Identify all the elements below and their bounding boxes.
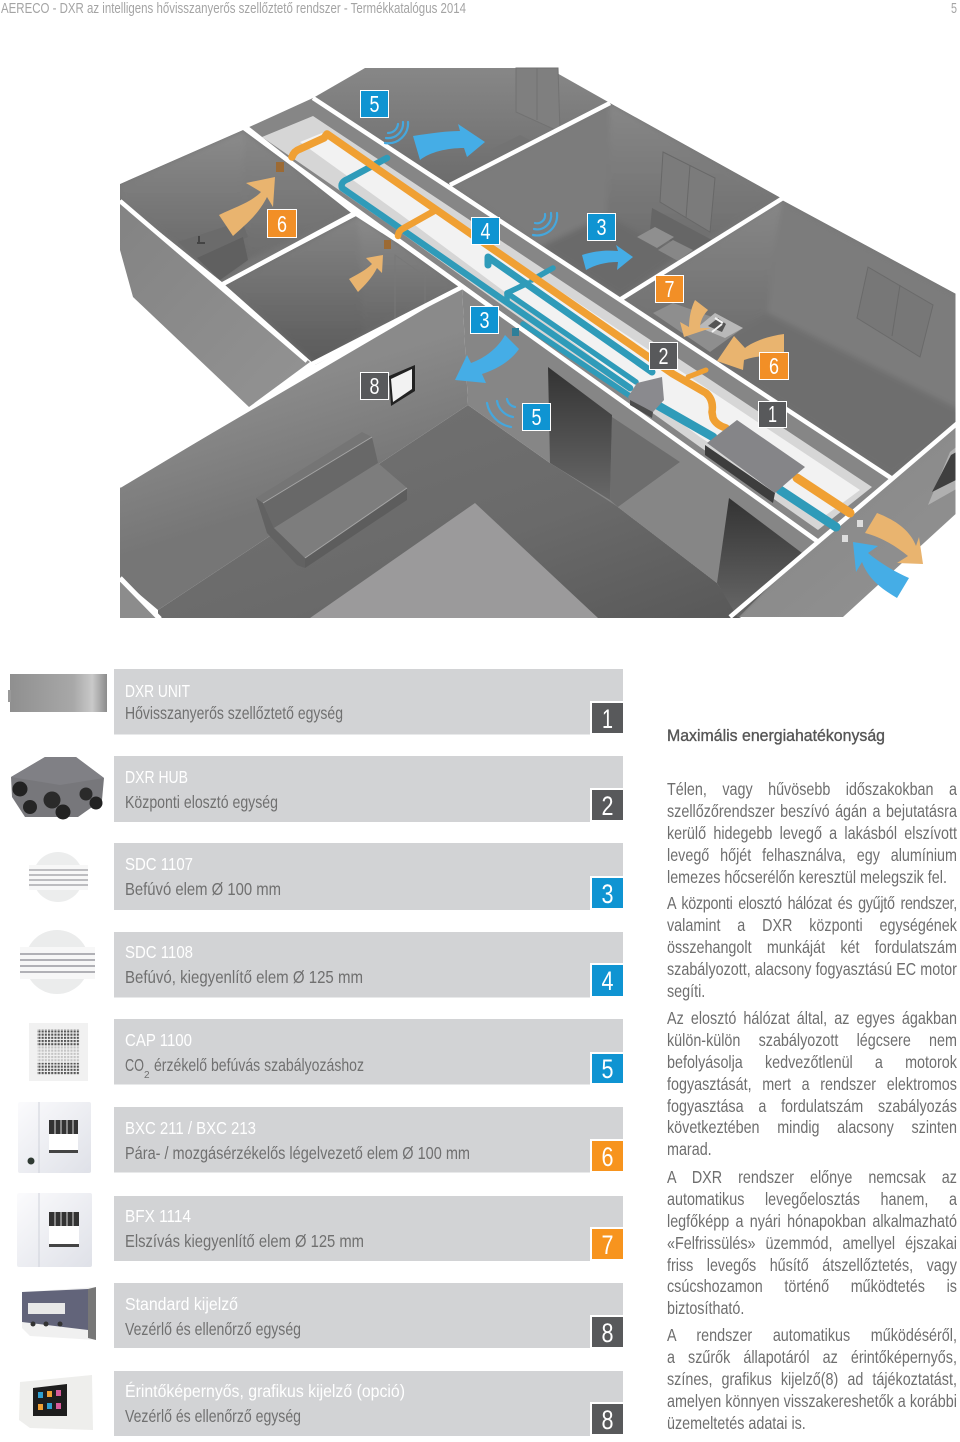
badge 4: 4 — [480, 218, 491, 244]
outlet vents — [842, 520, 863, 542]
badge 6: 6 — [769, 353, 779, 379]
big room: left wall — [120, 287, 468, 610]
room: small middle room — [225, 215, 462, 365]
badge 4: 4 — [602, 966, 614, 996]
section heading: Maximális energiahatékonyság — [667, 727, 885, 745]
paragraph 4: biztosítható. — [667, 1298, 744, 1318]
row bar — [114, 843, 623, 910]
badge 3 — [588, 214, 616, 240]
room: top room — [313, 68, 610, 185]
badge 1: 1 — [602, 704, 613, 734]
row bar — [114, 1107, 623, 1172]
badge 8 — [360, 372, 388, 400]
badge 7 — [590, 1227, 624, 1261]
row text: Vezérlő és ellenőrző egység — [125, 1319, 301, 1339]
paragraph 1: szellőzőrendszer beszívó ágán a bejutatásra — [667, 801, 957, 821]
product image: DXR unit — [8, 674, 107, 712]
row text: SDC 1107 — [125, 854, 193, 874]
paragraph 4: legfőképp a nyári hónapokban alkalmazható — [667, 1211, 957, 1231]
product image: standard display — [22, 1287, 96, 1340]
badge 1: 1 — [768, 401, 777, 427]
component: DXR hub — [628, 377, 664, 418]
badge 7: 7 — [664, 276, 674, 302]
row text: Pára- / mozgásérzékelős légelvezető elem Ø 100 mm — [125, 1143, 470, 1163]
product image: touch display — [19, 1375, 93, 1430]
row text: SDC 1108 — [125, 942, 193, 962]
row: SDC 1107 — [29, 843, 624, 910]
row text: CAP 1100 — [125, 1030, 192, 1050]
paragraph 4: A DXR rendszer előnye nemcsak az — [667, 1167, 957, 1187]
paragraph 3: befolyásolja kedvezőtlenül a motorok — [667, 1052, 957, 1072]
badge 4 — [590, 963, 624, 998]
badge 2: 2 — [602, 791, 614, 821]
door openings — [548, 367, 802, 618]
row text: BXC 211 / BXC 213 — [125, 1118, 256, 1138]
row text — [125, 942, 363, 987]
paragraph 2: valamint a DXR központi egységének — [667, 915, 957, 935]
badge 8 — [590, 1315, 624, 1349]
badge 5: 5 — [370, 91, 380, 117]
badge 3: 3 — [596, 214, 606, 240]
row text — [125, 1294, 301, 1339]
product image: BXC — [18, 1102, 91, 1173]
callout badges — [268, 90, 788, 430]
product image: BFX — [17, 1193, 92, 1267]
corridor: light floor — [262, 116, 872, 530]
row text: DXR HUB — [125, 767, 188, 787]
exterior wall: left — [120, 203, 310, 407]
paragraph 4 — [667, 1167, 957, 1318]
badge 7 — [656, 276, 684, 302]
paragraph 4: csúcshozamon történő működtetés is — [667, 1276, 957, 1296]
row bar — [114, 756, 623, 822]
row text: Hővisszanyerős szellőztető egység — [125, 703, 343, 723]
row text — [125, 767, 278, 812]
row: BFX 1114 — [17, 1193, 624, 1267]
badge 8: 8 — [602, 1318, 614, 1348]
paragraph 1: kerülő hidegebb levegő a lakásból elszívott — [667, 823, 957, 843]
row text: Központi elosztó egység — [125, 792, 278, 812]
badge 8: 8 — [602, 1405, 614, 1435]
room: top left bathroom — [120, 130, 355, 283]
badge 6: 6 — [602, 1142, 614, 1172]
paragraph 3: fogyasztása a fordulatszám szabályozás — [667, 1096, 957, 1116]
bench — [256, 432, 407, 568]
row: DXR UNIT — [8, 669, 624, 735]
badge 5: 5 — [532, 404, 542, 430]
tablet display on wall — [389, 365, 415, 406]
paragraph 5: amelyen könnyen visszakereshetők a korábbi — [667, 1391, 957, 1411]
badge 3 — [470, 306, 498, 334]
paragraph 3 — [667, 1008, 957, 1159]
row bar — [114, 932, 623, 998]
paragraph 4: friss levegős hűsítő átszellőztetés, vagy — [667, 1255, 957, 1275]
paragraph 2: összehangolt munkáját két fordulatszám — [667, 937, 957, 957]
paragraph 5 — [667, 1325, 957, 1433]
vents on walls — [276, 162, 519, 336]
paragraph 5: üzemeltetés adatai is. — [667, 1413, 806, 1433]
badge 6 — [590, 1139, 624, 1173]
row text: BFX 1114 — [125, 1206, 191, 1226]
badge 5 — [590, 1052, 624, 1085]
row bar — [114, 669, 623, 734]
badge 6: 6 — [277, 211, 287, 237]
paragraph 4: automatikus levegőelosztás hanem, a — [667, 1189, 957, 1209]
illustration: ventilation system in apartment cutaway — [120, 68, 960, 619]
badge 2 — [650, 342, 678, 370]
row: Érintőképernyős, grafikus kijelző — [19, 1371, 624, 1436]
badge 6 — [268, 210, 296, 238]
badge 3 — [590, 876, 624, 910]
badge 5 — [522, 404, 550, 430]
big room: floor — [158, 405, 740, 618]
blue airflow arrows — [413, 124, 909, 598]
badge 2: 2 — [658, 343, 668, 369]
product image: SDC 1107 — [29, 852, 88, 902]
orange airflow arrows — [219, 177, 923, 564]
room: right room — [621, 200, 960, 478]
paragraph 2 — [667, 893, 957, 1001]
row text — [125, 854, 281, 899]
exterior wall: right with window — [730, 423, 960, 617]
product list — [8, 669, 624, 1436]
paragraph 1: levegő hőjét felhasználva, egy alumínium — [667, 845, 957, 865]
row text: Befúvó elem Ø 100 mm — [125, 879, 281, 899]
paragraph 1: lemezes hőcserélőn keresztül melegszik fel. — [667, 867, 947, 887]
row text: 2 — [144, 1070, 150, 1081]
row: DXR HUB — [11, 756, 624, 822]
row text: Befúvó, kiegyenlítő elem Ø 125 mm — [125, 967, 363, 987]
row text: Standard kijelző — [125, 1294, 238, 1314]
badge 1 — [758, 401, 786, 428]
teal supply ducts — [342, 158, 836, 527]
row bar — [114, 1283, 623, 1348]
paragraph 3: külön-külön szabályozott légcsere nem — [667, 1030, 957, 1050]
header title: AERECO - DXR az intelligens hővisszanyerős szellőztető rendszer - Termékkatalógus 2014 — [1, 1, 466, 17]
wall top lines — [120, 98, 960, 619]
paragraph 3: következtében mindig alacsony szinten — [667, 1117, 957, 1137]
room: middle right room — [450, 103, 781, 300]
component: DXR unit — [705, 420, 805, 503]
paragraph 3: marad. — [667, 1139, 712, 1159]
badge 2 — [590, 788, 624, 822]
paragraph 2: szabályozott, alacsony fogyasztású EC motor — [667, 959, 957, 979]
badge 1 — [590, 701, 624, 735]
row: Standard kijelző — [22, 1283, 624, 1349]
badge 4 — [472, 218, 500, 244]
paragraph 5: A rendszer automatikus működéséről, — [667, 1325, 957, 1345]
paragraph 3: fogyasztását, mert a rendszer elektromos — [667, 1074, 957, 1094]
row text — [125, 1381, 405, 1426]
badge 6 — [760, 352, 788, 380]
paragraph 1 — [667, 779, 957, 887]
row text — [125, 1030, 364, 1081]
paragraph 5: színes, grafikus kijelző(8) ad tájékoztatást, — [667, 1369, 957, 1389]
product image: SDC 1108 — [20, 930, 95, 994]
row text — [125, 1206, 364, 1251]
row text: CO — [125, 1055, 144, 1075]
product image: CAP 1100 — [29, 1023, 88, 1081]
paragraph 3: Az elosztó hálózat által, az egyes ágakban — [667, 1008, 957, 1028]
kitchen counter with appliance — [653, 303, 743, 352]
product image: DXR hub — [11, 757, 104, 820]
badge 8: 8 — [370, 373, 380, 399]
paragraph 1: Télen, vagy hűvösebb időszakokban a — [667, 779, 957, 799]
paragraph 2: A központi elosztó hálózat és gyűjtő rendszer, — [667, 893, 957, 913]
page number: 5 — [951, 1, 957, 17]
paragraph 2: segíti. — [667, 981, 705, 1001]
badge 5 — [360, 90, 388, 118]
big room: right wall — [462, 287, 817, 618]
row text: Elszívás kiegyenlítő elem Ø 125 mm — [125, 1231, 364, 1251]
corridor: walls — [247, 98, 891, 540]
big room: rug — [310, 503, 598, 618]
row: CAP 1100 — [29, 1019, 624, 1085]
badge 5: 5 — [602, 1054, 614, 1084]
orange extract ducts — [292, 134, 850, 513]
row: BXC 211 / BXC 213 — [18, 1102, 624, 1173]
row: SDC 1108 — [20, 930, 624, 998]
row text: DXR UNIT — [125, 681, 190, 701]
badge 7: 7 — [602, 1230, 614, 1260]
row bar — [114, 1371, 623, 1436]
page header — [1, 1, 957, 17]
badge 3: 3 — [602, 879, 614, 909]
paragraph 4: «Felfrissülés» üzemmód, amellyel éjszakai — [667, 1233, 957, 1253]
row text: Vezérlő és ellenőrző egység — [125, 1406, 301, 1426]
row text: Érintőképernyős, grafikus kijelző (opció) — [125, 1381, 405, 1401]
row text: érzékelő befúvás szabályozáshoz — [154, 1055, 364, 1075]
row bar — [114, 1196, 623, 1261]
row text — [125, 1118, 470, 1163]
row bar — [114, 1019, 623, 1084]
badge 3: 3 — [480, 307, 490, 333]
badge 8 — [590, 1402, 624, 1436]
paragraph 5: a szűrők állapotáról az érintőképernyős, — [667, 1347, 957, 1367]
airflow waves — [385, 122, 557, 427]
row text — [125, 681, 343, 723]
